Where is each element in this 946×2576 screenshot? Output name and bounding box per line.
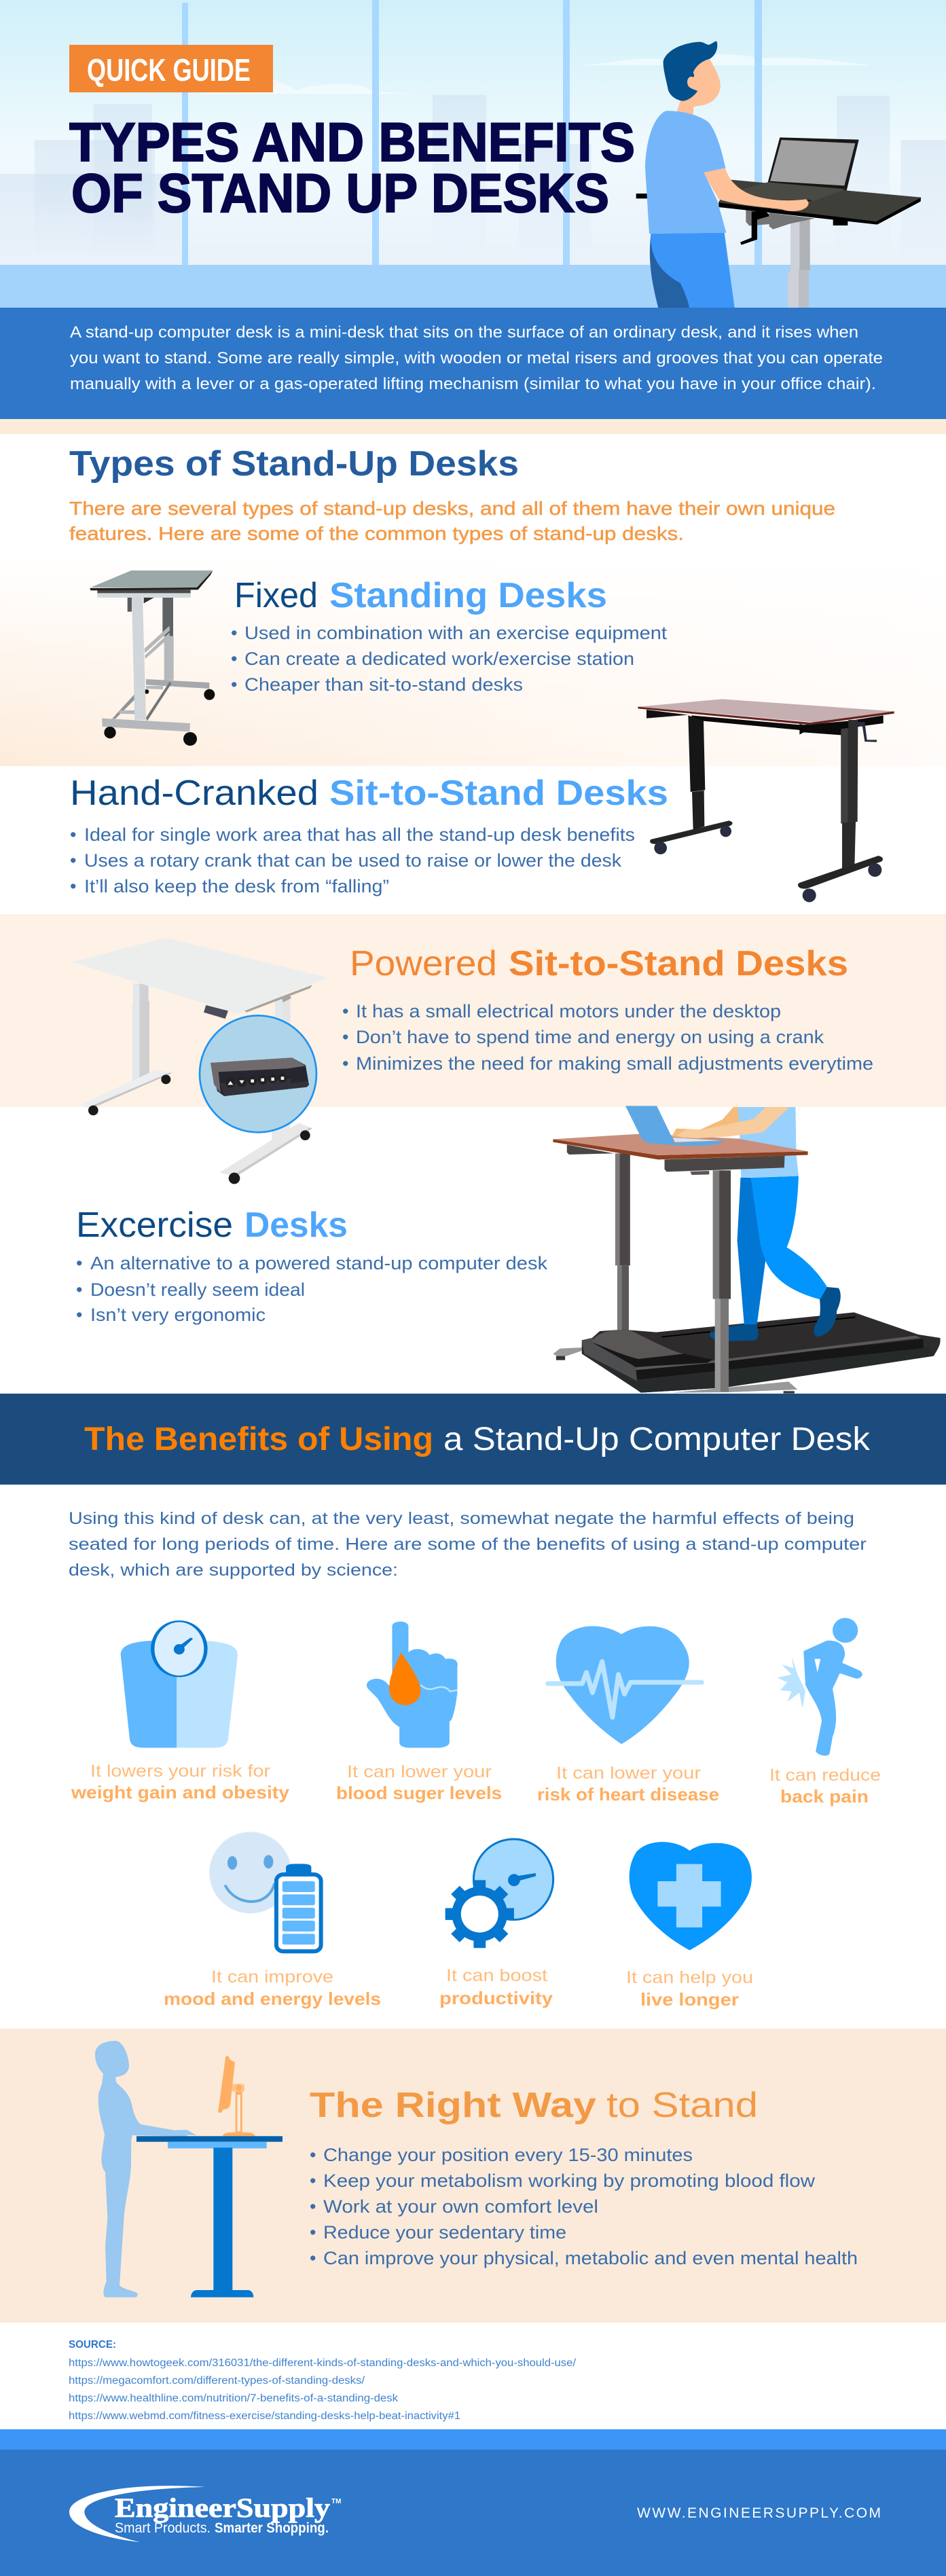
- list: hand-cranked points: It’ll also keep the desk from “falling”: [84, 876, 389, 896]
- illustration: man at crank desk: [636, 41, 921, 308]
- icon: gear and clock: [445, 1839, 553, 1948]
- text: types intro: There are several types of stand-up desks, and all of them have their own unique: [69, 498, 835, 519]
- list: powered desk points: •: [342, 1001, 348, 1021]
- heading: types of stand-up desks: Types of Stand-Up Desks: [69, 444, 519, 484]
- heading: exercise desks: Excercise: [76, 1205, 233, 1245]
- label: live longer: live longer: [640, 1989, 739, 2010]
- list: exercise desk points: •: [76, 1305, 82, 1325]
- list: powered desk points: Minimizes the need for making small adjustments everytime: [356, 1053, 873, 1074]
- heading: hand-cranked desks: [70, 774, 668, 813]
- label: blood sugar: It can lower your: [347, 1762, 492, 1781]
- logo: EngineerSupply: Smart Products.: [115, 2520, 211, 2536]
- list: fixed desk points: Used in combination with an exercise equipment: [244, 623, 668, 643]
- title: TYPES AND BENEFITS: [69, 112, 635, 173]
- label: heart disease: [537, 1764, 719, 1804]
- heading: exercise desks: [76, 1205, 348, 1245]
- list: exercise desk points: An alternative to a powered stand-up computer desk: [90, 1253, 548, 1273]
- panel: footer: [0, 2429, 946, 2576]
- list: powered desk points: Don’t have to spend time and energy on using a crank: [356, 1027, 824, 1047]
- list: right way points: Reduce your sedentary time: [323, 2222, 566, 2243]
- list: hand-cranked points: Uses a rotary crank that can be used to raise or lower the desk: [84, 850, 622, 871]
- list: powered desk points: [342, 1001, 873, 1074]
- label: back pain: [769, 1766, 881, 1807]
- label: productivity: It can boost: [446, 1966, 547, 1985]
- panel: fixed desk background: [0, 557, 946, 766]
- list: hand-cranked points: •: [70, 850, 76, 871]
- panel: the right way to stand background: [0, 2029, 946, 2323]
- logo: EngineerSupply: [69, 2486, 341, 2542]
- badge: quick guide: [69, 45, 273, 92]
- text: website: WWW.ENGINEERSUPPLY.COM: [637, 2505, 881, 2521]
- list: fixed desk points: •: [231, 623, 237, 643]
- heading: powered desks: Powered: [350, 944, 497, 983]
- text: benefits intro: Using this kind of desk can, at the very least, somewhat negate the harmful effects of being: [69, 1509, 854, 1528]
- label: weight gain: weight gain and obesity: [71, 1782, 290, 1802]
- list: powered desk points: •: [342, 1053, 348, 1074]
- list: right way points: •: [310, 2145, 316, 2165]
- heading: fixed standing desks: Standing Desks: [329, 576, 607, 615]
- label: back pain: back pain: [780, 1786, 869, 1807]
- banner: the benefits of using: a Stand-Up Computer Desk: [443, 1421, 871, 1457]
- label: weight gain: [71, 1762, 290, 1802]
- label: mood and energy: [164, 1967, 381, 2009]
- list: right way points: [310, 2145, 858, 2268]
- illustration: person at standing desk: [95, 2041, 283, 2298]
- logo: EngineerSupply: TM: [331, 2498, 341, 2505]
- list: fixed desk points: Can create a dedicated work/exercise station: [244, 649, 634, 669]
- list: right way points: Change your position every 15-30 minutes: [323, 2145, 693, 2165]
- label: live longer: [626, 1968, 753, 2010]
- list: right way points: Can improve your physical, metabolic and even mental health: [323, 2248, 858, 2268]
- heading: powered desks: Sit-to-Stand Desks: [509, 944, 848, 983]
- panel: introduction band: manually with a lever or a gas-operated lifting mechanism (similar to what you have in your office chair).: [70, 375, 876, 393]
- label: productivity: [439, 1966, 553, 2008]
- title: [69, 112, 635, 224]
- heading: exercise desks: Desks: [244, 1205, 348, 1245]
- text: sources: SOURCE:: [69, 2339, 116, 2351]
- label: back pain: It can reduce: [769, 1766, 881, 1785]
- icon: weighing scale: [121, 1621, 238, 1748]
- list: fixed desk points: •: [231, 649, 237, 669]
- text: types intro: features. Here are some of the common types of stand-up desks.: [69, 523, 684, 544]
- illustration: treadmill desk: [553, 1106, 941, 1394]
- heading: hand-cranked desks: Sit-to-Stand Desks: [329, 774, 668, 813]
- panel: introduction band: you want to stand. Some are really simple, with wooden or metal risers and grooves that you can operate: [70, 349, 883, 367]
- label: blood sugar: blood suger levels: [336, 1783, 502, 1803]
- text: sources: https://megacomfort.com/different-types-of-standing-desks/: [69, 2375, 365, 2387]
- list: exercise desk points: •: [76, 1253, 82, 1273]
- list: hand-cranked points: •: [70, 876, 76, 896]
- illustration: fixed standing desk: [90, 570, 215, 746]
- label: live longer: It can help you: [626, 1968, 753, 1987]
- label: mood and energy: It can improve: [211, 1967, 333, 1987]
- list: hand-cranked points: Ideal for single work area that has all the stand-up desk benefits: [84, 824, 635, 845]
- list: right way points: •: [310, 2222, 316, 2243]
- label: weight gain: It lowers your risk for: [90, 1762, 270, 1781]
- label: mood and energy: mood and energy levels: [164, 1989, 381, 2009]
- list: right way points: •: [310, 2196, 316, 2217]
- panel: powered desk background: [0, 914, 946, 1107]
- list: exercise desk points: [76, 1253, 548, 1325]
- list: fixed desk points: •: [231, 674, 237, 695]
- heading: the right way to stand: [310, 2086, 758, 2125]
- heading: the right way to stand: The Right Way: [310, 2086, 596, 2125]
- label: productivity: productivity: [439, 1988, 553, 2008]
- list: hand-cranked points: •: [70, 824, 76, 845]
- banner: the benefits of using: The Benefits of Using: [84, 1421, 433, 1457]
- panel: hero background: [0, 0, 946, 308]
- text: sources: [69, 2339, 577, 2422]
- list: powered desk points: •: [342, 1027, 348, 1047]
- logo: EngineerSupply: EngineerSupply: [115, 2492, 330, 2523]
- label: blood sugar: [336, 1762, 502, 1803]
- icon: heart with cross: [630, 1842, 752, 1951]
- label: heart disease: risk of heart disease: [537, 1784, 719, 1804]
- icon: heart with pulse: [548, 1626, 702, 1744]
- list: fixed desk points: [231, 623, 668, 695]
- text: benefits intro: desk, which are supported by science:: [69, 1561, 398, 1580]
- list: fixed desk points: Cheaper than sit-to-stand desks: [244, 674, 523, 695]
- illustration: hand-cranked desk: [638, 699, 894, 902]
- list: exercise desk points: Isn’t very ergonomic: [90, 1305, 266, 1325]
- list: right way points: Keep your metabolism working by promoting blood flow: [323, 2171, 816, 2191]
- text: types intro: [69, 498, 835, 544]
- text: benefits intro: [69, 1509, 867, 1580]
- list: exercise desk points: •: [76, 1280, 82, 1300]
- icon: smiley with battery: [209, 1832, 321, 1951]
- text: sources: https://www.howtogeek.com/316031/the-different-kinds-of-standing-desks-and-which-you-should-use/: [69, 2357, 577, 2369]
- title: OF STAND UP DESKS: [71, 163, 609, 224]
- text: benefits intro: seated for long periods of time. Here are some of the benefits of using a stand-up computer: [69, 1535, 867, 1554]
- list: right way points: Work at your own comfort level: [323, 2196, 598, 2217]
- label: heart disease: It can lower your: [556, 1764, 701, 1783]
- heading: the right way to stand: to Stand: [606, 2086, 758, 2125]
- badge: quick guide: QUICK GUIDE: [87, 52, 251, 88]
- list: exercise desk points: Doesn’t really seem ideal: [90, 1280, 305, 1300]
- heading: hand-cranked desks: Hand-Cranked: [70, 774, 319, 813]
- icon: back pain figure: [777, 1618, 862, 1756]
- list: hand-cranked points: [70, 824, 635, 896]
- text: sources: https://www.healthline.com/nutrition/7-benefits-of-a-standing-desk: [69, 2393, 398, 2404]
- heading: powered desks: [350, 944, 848, 983]
- list: right way points: •: [310, 2171, 316, 2191]
- panel: introduction band: A stand-up computer desk is a mini-desk that sits on the surface of an ordinary desk, and it rises when: [70, 323, 858, 342]
- heading: fixed standing desks: Fixed: [234, 576, 318, 615]
- logo: EngineerSupply: Smarter Shopping.: [215, 2520, 329, 2536]
- banner: the benefits of using: [0, 1394, 946, 1485]
- icon: hand with blood drop: [367, 1622, 458, 1748]
- panel: introduction band: [0, 308, 946, 434]
- illustration: powered desk: [72, 938, 327, 1184]
- list: powered desk points: It has a small electrical motors under the desktop: [356, 1001, 781, 1021]
- list: right way points: •: [310, 2248, 316, 2268]
- text: sources: https://www.webmd.com/fitness-exercise/standing-desks-help-beat-inactivity#1: [69, 2410, 460, 2422]
